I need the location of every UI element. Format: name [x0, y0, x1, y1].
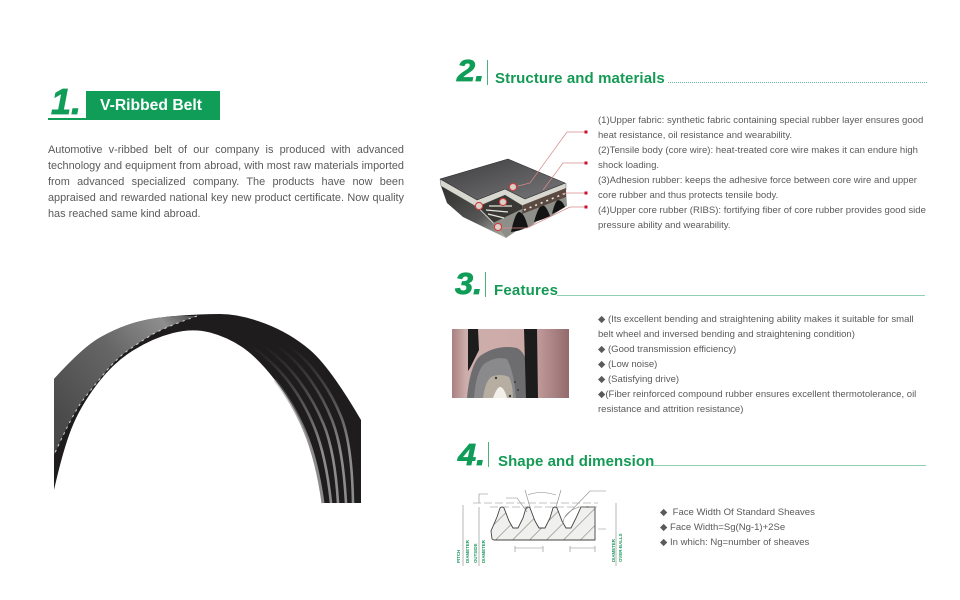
intro paragraph: appraised and rewarded national key new product certificate. Now quality: [48, 192, 404, 204]
green axis labels: OVER-BALLS: [618, 533, 623, 562]
features text: ◆ (Good transmission efficiency): [598, 344, 736, 355]
features text: ◆ (Its excellent bending and straightening ability makes it suitable for small: [598, 314, 914, 325]
sheave profile technical drawing: [456, 490, 623, 566]
structure and materials text: [598, 115, 926, 231]
structure and materials text: (3)Adhesion rubber: keeps the adhesive force between core wire and upper: [598, 175, 917, 186]
leader lines: [502, 132, 585, 228]
structure and materials text: core rubber and thus protects tensile body.: [598, 190, 778, 201]
front cord band: [522, 188, 566, 214]
heading number 3: 3.: [455, 266, 482, 301]
shape and dimension text: ◆ Face Width Of Standard Sheaves: [660, 507, 815, 518]
structure and materials text: shock loading.: [598, 160, 659, 171]
dimension lines: [463, 490, 616, 566]
heading divider: [487, 60, 488, 85]
heading number 2: 2.: [457, 53, 484, 88]
green title box: [86, 91, 220, 120]
heading number 4: 4.: [458, 437, 485, 472]
belt right strap: [524, 329, 538, 398]
structure and materials text: (2)Tensile body (core wire): heat-treated core wire makes it can endure high: [598, 145, 918, 156]
structure and materials text: heat resistance, oil resistance and wearability.: [598, 130, 792, 141]
section 3 heading: [454, 266, 925, 301]
heading text: Features: [494, 282, 558, 299]
pulley front face: [474, 358, 516, 398]
green axis labels: OUTSIDE: [473, 543, 478, 563]
structure and materials text: pressure ability and wearability.: [598, 220, 730, 231]
features text: ◆ (Low noise): [598, 359, 657, 370]
intro paragraph: Automotive v-ribbed belt of our company is produced with advanced: [48, 144, 404, 156]
intro paragraph: technology and equipment from abroad, with most raw materials imported: [48, 160, 404, 172]
heading text: Structure and materials: [495, 70, 665, 87]
belt side body: [441, 186, 506, 238]
intro paragraph: [48, 144, 404, 220]
heading underline: [48, 118, 88, 120]
belt left strap: [468, 329, 479, 371]
section 2 heading: [456, 53, 927, 88]
intro paragraph: has reached same kind abroad.: [48, 208, 201, 220]
callout marker 2: [499, 198, 507, 206]
pulley centre hole: [493, 387, 507, 398]
shape and dimension text: [660, 507, 815, 548]
pulley photo illustration: [452, 329, 569, 398]
red end dots: [584, 130, 588, 208]
shape and dimension text: ◆ In which: Ng=number of sheaves: [660, 537, 809, 548]
pulley hub: [483, 375, 513, 398]
features text: resistance and attrition resistance): [598, 404, 743, 415]
features text: ◆(Fiber reinforced compound rubber ensures excellent thermotolerance, oil: [598, 389, 916, 400]
heading rule: [668, 82, 927, 83]
heading divider: [485, 272, 486, 297]
belt exposed core: [477, 195, 523, 226]
green axis labels: DIAMETER: [481, 539, 486, 563]
belt structure cross-section diagram: [440, 130, 588, 238]
callout marker 4: [494, 223, 502, 231]
belt ribs: [234, 325, 353, 503]
section 1 heading: [48, 81, 220, 122]
structure and materials text: (1)Upper fabric: synthetic fabric containing special rubber layer ensures good: [598, 115, 923, 126]
structure and materials text: (4)Upper core rubber (RIBS): fortifying fiber of core rubber provides good side: [598, 205, 926, 216]
bolt holes: [495, 377, 519, 397]
features text: [598, 314, 916, 415]
section 4 heading: [456, 437, 926, 472]
heading rule: [654, 465, 926, 466]
rib gaps: [511, 200, 565, 232]
pulley outer rim: [467, 347, 527, 398]
green axis labels: [456, 533, 623, 563]
belt top face: [440, 159, 565, 200]
belt body: [54, 314, 361, 503]
callout marker 1: [509, 183, 517, 191]
hatched profile: [491, 507, 595, 540]
belt photo illustration: [54, 314, 361, 504]
callout marker 3: [475, 202, 483, 210]
belt side face: [54, 316, 197, 455]
green title box: V-Ribbed Belt: [100, 97, 202, 114]
heading rule: [557, 295, 925, 296]
green axis labels: DIAMETER: [465, 539, 470, 563]
belt top layer strip: [440, 179, 566, 207]
features text: belt wheel and inversed bending and straightening condition): [598, 329, 855, 340]
photo background: [452, 329, 569, 398]
tensile cords: [524, 193, 566, 210]
features text: ◆ (Satisfying drive): [598, 374, 679, 385]
heading divider: [488, 442, 489, 467]
shape and dimension text: ◆ Face Width=Sg(Ng-1)+2Se: [660, 522, 785, 533]
heading number 1: 1.: [51, 81, 81, 122]
intro paragraph: from advanced specialized company. The products have now been: [48, 176, 404, 188]
green axis labels: PITCH: [456, 550, 461, 563]
belt ribs: [493, 190, 567, 238]
heading text: Shape and dimension: [498, 453, 654, 470]
belt stitching: [54, 316, 197, 455]
green axis labels: DIAMETER: [611, 538, 616, 562]
